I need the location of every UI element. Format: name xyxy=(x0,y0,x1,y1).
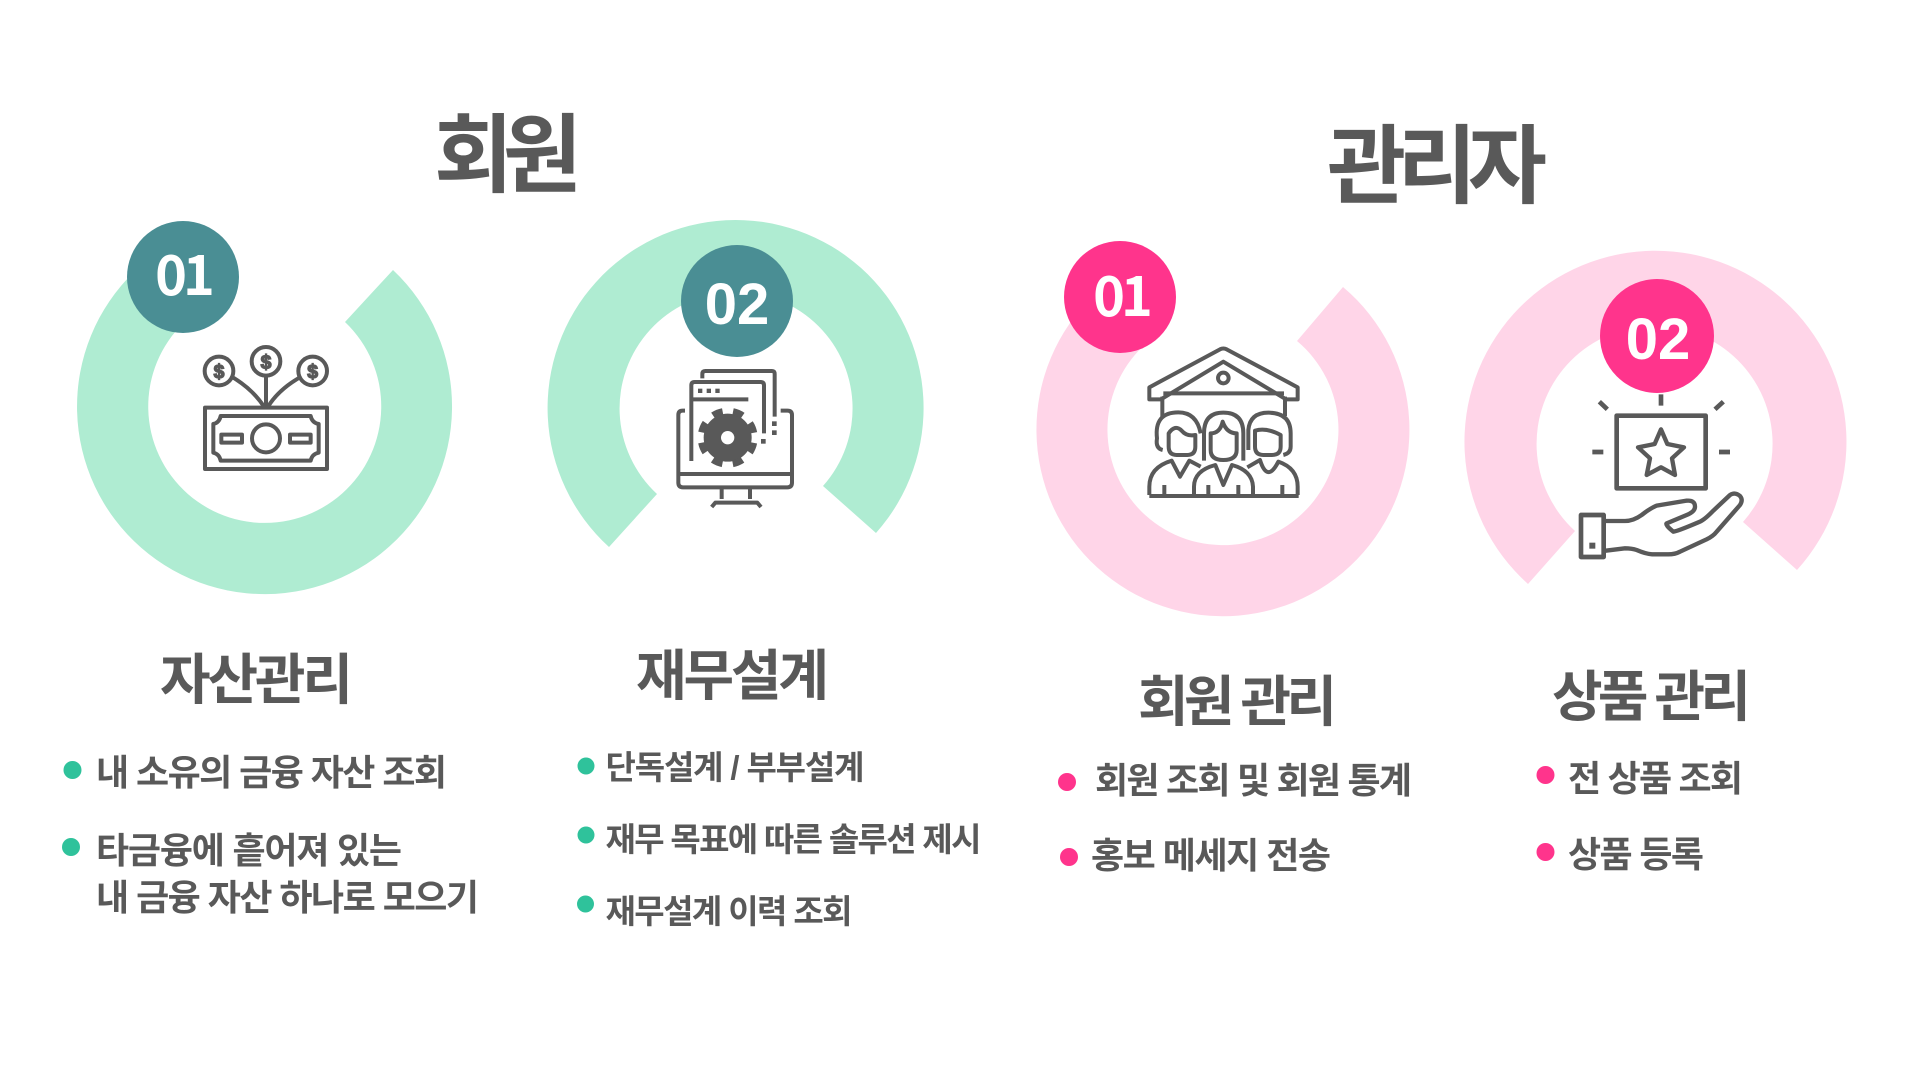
bullet: 전 상품 조회: 전 상품 조회 xyxy=(1568,758,1743,799)
badge: 02: 02 xyxy=(1626,307,1690,372)
badge: 02 xyxy=(681,245,793,357)
bullet: 내 소유의 금융 자산 조회: 내 소유의 금융 자산 조회 xyxy=(96,752,447,793)
heading: 회원: 회원 xyxy=(434,108,582,204)
subheading: 재무설계: 재무설계 xyxy=(636,645,829,707)
bullet: 타금융에 흩어져 있는 내 금융 자산 하나로 모으기: 타금융에 흩어져 있는 xyxy=(96,830,402,871)
bullet: 홍보 메세지 전송: 홍보 메세지 전송 xyxy=(1091,835,1331,876)
ring: pink open donut 1 xyxy=(1036,282,1409,616)
ring: green open donut 2 xyxy=(548,220,924,547)
badge: 02 xyxy=(1600,279,1714,393)
bullet: 타금융에 흩어져 있는 내 금융 자산 하나로 모으기: 내 금융 자산 하나로 모으기 xyxy=(96,877,479,918)
icon: money bill with dollar coins xyxy=(205,347,327,469)
bullet: 단독설계 / 부부설계: 단독설계 / 부부설계 xyxy=(606,749,864,786)
icon: monitor with windows and gear xyxy=(678,371,792,507)
panel: 재무설계 xyxy=(548,220,982,930)
badge: 01 xyxy=(1064,241,1176,353)
badge: 02: 02 xyxy=(705,272,769,337)
subheading: 상품 관리: 상품 관리 xyxy=(1552,666,1751,728)
bullet: 회원 조회 및 회원 통계: 회원 조회 및 회원 통계 xyxy=(1095,760,1412,801)
heading: 관리자: 관리자 xyxy=(1327,119,1547,215)
icon: money bill with dollar coins: $ xyxy=(261,352,272,373)
badge: 01 xyxy=(127,221,239,333)
icon: money bill with dollar coins: $ xyxy=(307,362,318,383)
icon: hand holding star card xyxy=(1581,394,1742,557)
bullet: 재무 목표에 따른 솔루션 제시: 재무 목표에 따른 솔루션 제시 xyxy=(606,821,982,858)
bullet: 재무설계 이력 조회: 재무설계 이력 조회 xyxy=(606,893,852,930)
badge: 01: 01 xyxy=(155,232,212,311)
ring: pink open donut 2 xyxy=(1464,251,1846,584)
ring: green open donut 1 xyxy=(77,248,452,594)
subheading: 자산관리: 자산관리 xyxy=(160,649,353,711)
bullet: 타금융에 흩어져 있는 내 금융 자산 하나로 모으기 xyxy=(62,830,479,918)
subheading: 회원 관리: 회원 관리 xyxy=(1138,671,1337,733)
badge: 01: 01 xyxy=(1093,253,1150,332)
panel: 자산관리 xyxy=(62,221,479,918)
bullet: 상품 등록: 상품 등록 xyxy=(1568,834,1704,875)
icon: money bill with dollar coins: $ xyxy=(214,362,225,383)
icon: building with three people xyxy=(1149,348,1299,496)
panel: 상품 관리 xyxy=(1464,251,1846,875)
panel: 회원 관리 xyxy=(1036,241,1412,876)
